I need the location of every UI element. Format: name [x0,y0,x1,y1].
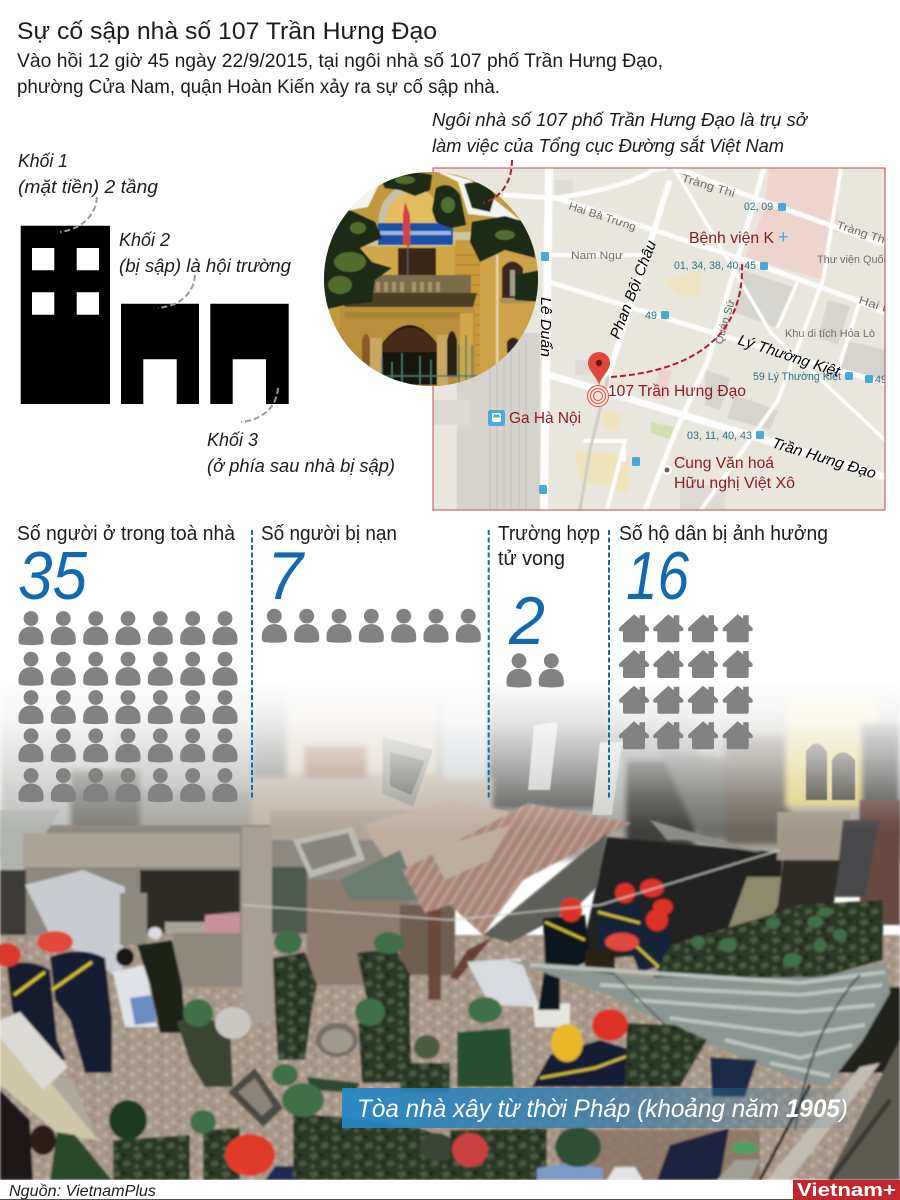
icon: railway station [488,410,505,426]
building diagram [21,197,289,422]
wall [360,245,455,276]
soldiers crowd right [653,900,883,978]
icons: 7 people [262,609,481,643]
basket [228,1068,283,1127]
block 2 [121,304,199,404]
trees [322,172,540,310]
map blocks [433,168,885,510]
icon: map pin [588,352,610,385]
stat: people in the building: 35 [18,538,87,614]
place labels: 107 Trần Hưng Đạo [608,383,746,400]
firefighters upper right [538,915,590,1010]
slab and dark opening [580,837,783,960]
red corrugated roof [402,803,631,935]
photo fade overlay [0,620,900,851]
map street labels: Quán Sứ [713,298,738,346]
logo: Vietnam+: Vietnam+ [797,1180,896,1200]
stat: victims [261,523,481,643]
major road names [537,238,878,482]
stat: deaths: Trường hợp [498,523,600,545]
major road names: Lý Thường Kiệt [736,332,843,381]
soldier group [273,952,317,1060]
cables [243,850,780,920]
dashed connector: label to building [483,160,512,203]
icon: location target [588,386,608,406]
map street labels: Thư viện Quốc [817,254,889,266]
railway tracks [490,330,526,510]
stat: deaths [498,523,600,687]
map [433,168,893,510]
papers [467,958,540,1007]
stat: deaths: 2 [508,583,545,659]
label: Khoi 3: Khối 3 [207,430,258,450]
sky [437,172,520,221]
label: Khoi 2: Khối 2 [119,230,170,250]
intro text: phường Cửa Nam, quận Hoàn Kiến xảy ra sự cố sập nhà. [17,77,500,98]
place labels: Ga Hà Nội [509,410,581,427]
callout: building description: làm việc của Tổng cục Đường sắt Việt Nam [432,136,784,156]
label: Khoi 1: (mặt tiền) 2 tầng [18,177,158,197]
icons: 35 people [18,611,238,802]
label: Khoi 2: (bị sập) là hội trường [119,256,291,276]
intro text: Vào hồi 12 giờ 45 ngày 22/9/2015, tại ngôi nhà số 107 phố Trần Hưng Đạo, [17,51,663,72]
stat: households: Số hộ dân bị ảnh hưởng [619,523,828,545]
stat: people in the building [17,523,238,802]
white cornice [357,232,482,246]
firefighters left [50,951,112,1073]
concrete beam [242,827,272,1023]
window [398,248,436,275]
label: Khoi 2 [119,230,291,276]
stat: victims: Số người bị nạn [261,523,397,545]
intro text [17,51,663,98]
bus route labels: 49 [875,374,887,386]
map street labels: Khu di tích Hỏa Lò [785,328,875,340]
icons: 2 people [506,653,564,687]
leader lines [60,197,278,422]
sign [378,223,453,245]
title: Sự cố sập nhà số 107 Trần Hưng Đạo [17,18,437,45]
bus route labels: 59 Lý Thường Kiệt [753,371,841,383]
bus route labels [539,201,887,494]
rubble pile [363,808,510,868]
place labels: Bệnh viện K [689,230,774,247]
source: Nguồn: VietnamPlus [9,1183,156,1200]
block 3 [210,304,289,404]
back walls [0,825,420,940]
photo: building facade [322,168,540,387]
label: Khoi 3 [207,430,395,476]
place labels: Cung Văn hoá [674,455,774,472]
label: Khoi 1 [18,151,158,197]
place labels: + [778,227,789,247]
stat: deaths: tử vong [498,548,565,570]
bus route labels: 01, 34, 38, 40, 45 [674,260,756,272]
dark rubble right [817,987,900,1073]
aluminium panel [25,870,125,980]
dashed connector: pin to hospital [611,263,742,377]
map street labels: Tràng Thi [680,172,736,200]
floor rubble [0,935,900,1180]
callout: building description: Ngôi nhà số 107 phố Trần Hưng Đạo là trụ sở [432,110,809,130]
map border [433,168,885,510]
footer [0,1180,900,1200]
fence [382,335,480,385]
lower facade [340,307,475,387]
place labels: Hữu nghị Việt Xô [674,475,795,492]
map street labels: Hai Bà Trưng [567,200,637,233]
firefighters lower [532,1040,632,1087]
banner caption [342,1088,848,1128]
pipe and right wall [827,1040,900,1180]
right window [502,262,523,298]
map street labels: Hai B [857,294,893,316]
civilian worker [137,940,186,1033]
major road names: Phan Bội Châu [607,238,660,341]
label: Khoi 1: Khối 1 [18,151,68,171]
map street labels [567,172,893,346]
air conditioner [293,827,365,878]
flag [403,202,410,247]
stat: victims: 7 [267,538,305,614]
photo: collapsed building [0,693,900,1180]
map street labels: Tràng Th [835,219,886,246]
bus route labels: 03, 11, 40, 43 [687,430,752,442]
bus route labels: 49 [645,310,657,322]
callout: building description [432,110,809,156]
major road names: Trần Hưng Đạo [770,435,878,482]
major road names: Lê Duẩn [537,297,554,357]
lower soldiers [113,1135,190,1180]
map street labels: Nam Ngư [571,250,624,262]
dark opening [140,870,240,933]
stat: households: 16 [626,538,689,614]
balcony [363,275,471,293]
block 1 [21,226,110,404]
stat: people in the building: Số người ở trong toà nhà [17,523,236,545]
column dividers [252,530,609,800]
bus route labels: 02, 09 [744,201,773,213]
icons: 16 houses [619,614,753,749]
upper haze layer [0,693,900,864]
left wall and signboard [0,1037,98,1140]
arch gable [384,191,438,224]
stat: households [619,523,828,749]
place labels [509,227,795,492]
metal roof [508,960,890,1087]
map roads [505,168,885,510]
label: Khoi 3: (ở phía sau nhà bị sập) [207,456,395,476]
banner caption: Tòa nhà xây từ thời Pháp (khoảng năm 1905) [357,1095,848,1123]
